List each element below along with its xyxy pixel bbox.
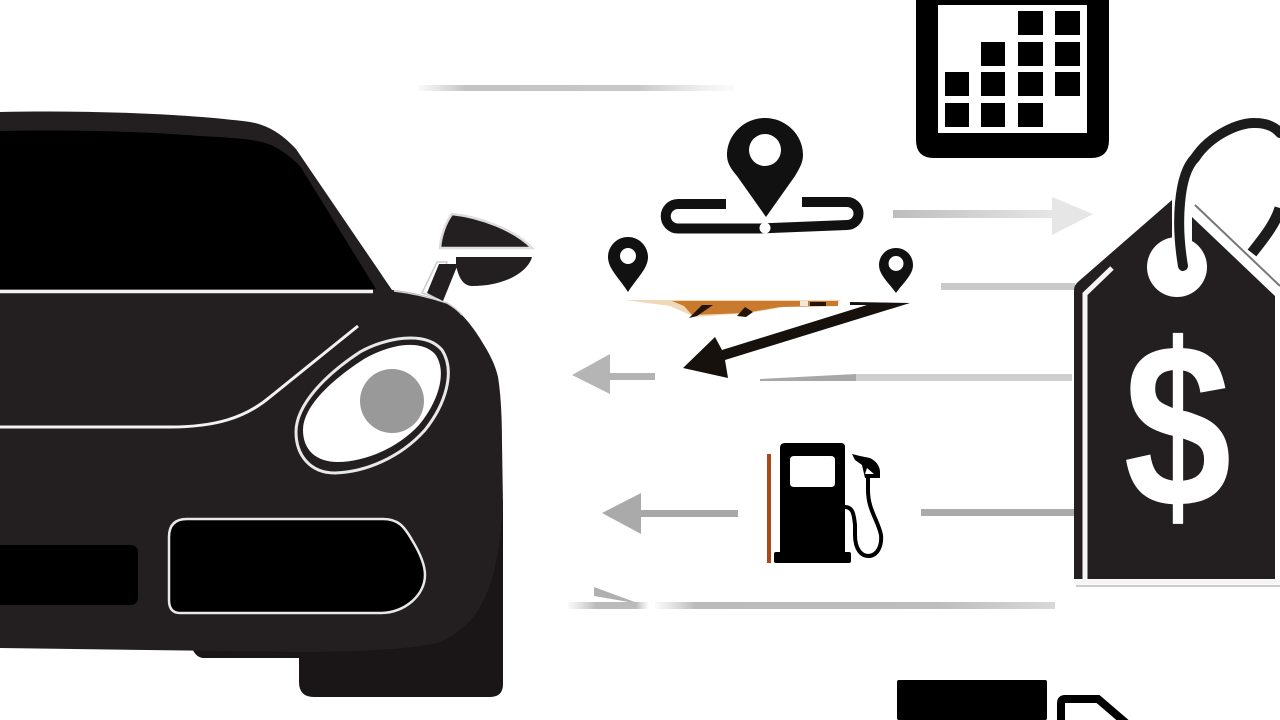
route notch — [760, 222, 770, 234]
icon: car front — [0, 111, 532, 697]
wing mirror — [422, 214, 532, 301]
wheel block and lower lip — [192, 500, 503, 697]
string — [1179, 123, 1280, 266]
line: bottom with arrow fragment — [568, 587, 1055, 609]
line: grey to tag lower — [921, 509, 1074, 516]
car body — [0, 111, 503, 652]
icon: small location pin left — [608, 237, 648, 292]
hood crease — [0, 326, 358, 427]
hood line — [0, 290, 373, 293]
icon: calendar bar chart — [916, 0, 1109, 158]
line: grey middle — [760, 374, 1072, 381]
route strip — [625, 300, 840, 318]
icon: price tag — [1074, 123, 1280, 586]
dollar sign: $ — [1124, 294, 1231, 557]
front grille — [169, 519, 425, 613]
tag body — [1074, 200, 1275, 579]
arrow: grey left upper — [572, 354, 655, 394]
route loop — [666, 202, 858, 228]
arrow: grey right upper — [893, 197, 1093, 235]
pin — [727, 118, 803, 217]
icon: main location pin on route — [666, 118, 858, 234]
orange bar — [767, 454, 771, 563]
tag bottom edge — [1074, 580, 1280, 584]
hose — [845, 476, 881, 556]
windshield — [0, 130, 376, 289]
line: grey to tag — [941, 283, 1075, 290]
icon: fuel pump — [767, 443, 881, 563]
tag top edge line — [1195, 205, 1280, 286]
headlight — [296, 338, 448, 473]
icon: delivery truck — [897, 680, 1126, 720]
tag inner outline — [1085, 268, 1112, 581]
left intake — [0, 545, 138, 605]
tag hole — [1147, 237, 1207, 297]
pump body — [774, 443, 851, 563]
decorative line: top — [418, 85, 734, 91]
arrow: black diagonal — [683, 302, 910, 378]
arrow: grey left lower — [602, 493, 738, 534]
hood edge highlight — [394, 291, 462, 315]
icon: small location pin right — [879, 248, 913, 293]
nozzle — [852, 454, 880, 478]
